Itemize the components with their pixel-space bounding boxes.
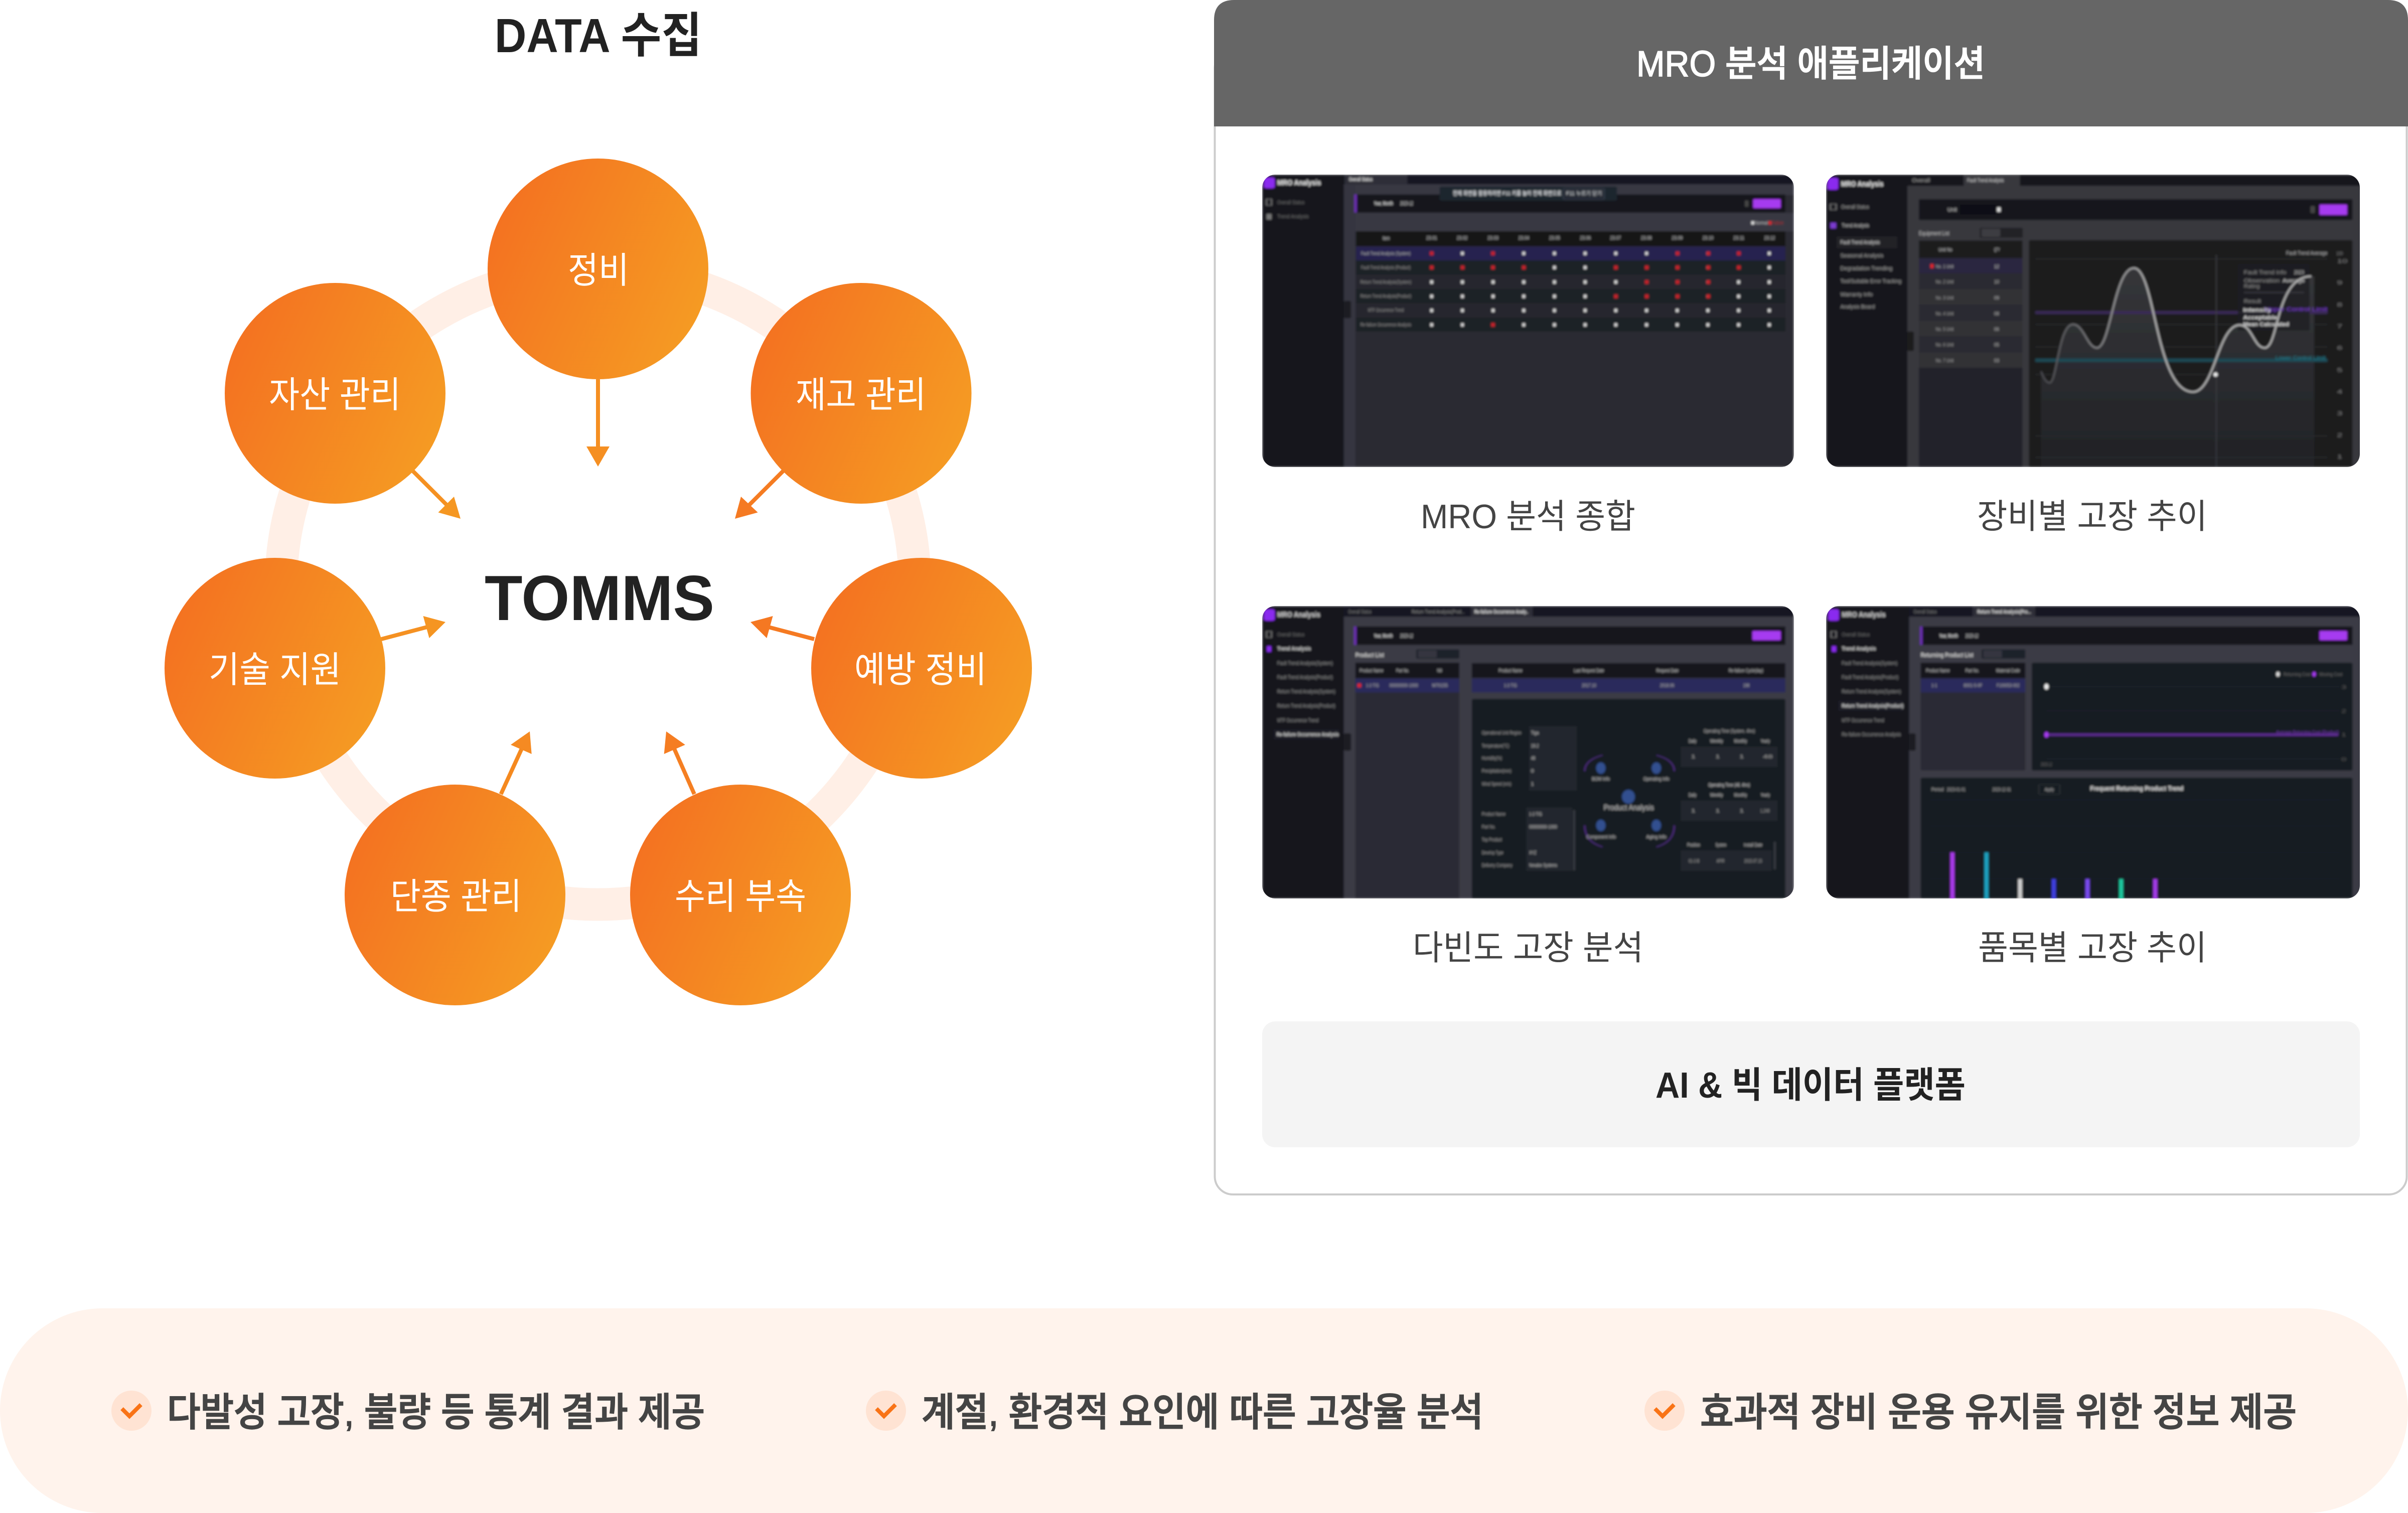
- screenshot: equipment fault trend chart: [1826, 175, 2361, 467]
- screenshot: equipment fault trend chart: Result: [2244, 298, 2262, 305]
- screenshot: equipment fault trend chart: No. 6 Unit: [1936, 342, 1953, 348]
- screenshot: re-failure occurrence analysis: Fault Trend Analysis(Product): [1277, 675, 1333, 680]
- screenshot: re-failure occurrence analysis: 198: [1743, 683, 1749, 688]
- panel header: MRO 분석 애플리케이션: [1636, 44, 1985, 84]
- screenshot: equipment fault trend chart: MRO Analysis: [1841, 180, 1883, 188]
- screenshot: equipment fault trend chart: 10: [1994, 279, 1999, 285]
- screenshot: equipment fault trend chart: 100: [2336, 251, 2343, 256]
- screenshot: equipment fault trend chart: Seasonal Analysis: [1841, 253, 1884, 259]
- screenshot: MRO overall status table: Fault Trend Analysis (Product): [1361, 265, 1411, 270]
- benefit 3: 효과적 장비 운용 유지를 위한 정보 제공: [1700, 1390, 2297, 1434]
- screenshot: MRO overall status table: [1262, 175, 1794, 467]
- node: 자산 관리: 자산 관리: [269, 375, 401, 415]
- node: 수리 부속: 수리 부속: [675, 877, 806, 917]
- screenshot: equipment fault trend chart: 2: [2337, 432, 2342, 438]
- screenshot: equipment fault trend chart: Degradation Trending: [1841, 265, 1892, 271]
- screenshot: equipment fault trend chart: Tool/Suitable Error Tracking: [1841, 278, 1901, 284]
- screenshot: equipment fault trend chart: No. 5 Unit: [1936, 327, 1953, 333]
- screenshot: returning product trend: Returning Cost: [2283, 672, 2311, 677]
- screenshot: equipment fault trend chart: 05: [1994, 342, 1999, 348]
- screenshot: re-failure occurrence analysis: Daily: [1689, 738, 1697, 744]
- screenshot: returning product trend: 2023-12-31: [1992, 787, 2011, 793]
- screenshot: re-failure occurrence analysis: 19.2: [1531, 743, 1539, 749]
- screenshot: re-failure occurrence analysis: 2023-12: [1400, 633, 1413, 639]
- screenshot: equipment fault trend chart: No. 1 Unit: [1936, 264, 1953, 269]
- screenshot: re-failure occurrence analysis: Operating Time (All, 4hrs): [1708, 782, 1750, 788]
- screenshot: equipment fault trend chart: 06: [1994, 327, 1999, 333]
- left section title: DATA 수집: [495, 9, 702, 63]
- screenshot: equipment fault trend chart: 1: [2337, 454, 2342, 460]
- screenshot: returning product trend: 2023-12: [1966, 633, 1979, 639]
- screenshot: re-failure occurrence analysis: Return Trend Analysis(Prod...: [1412, 609, 1465, 615]
- node: 정비: [488, 159, 708, 379]
- screenshot: equipment fault trend chart: 08: [1994, 311, 1999, 317]
- screenshot: equipment fault trend chart: 10: [2337, 258, 2347, 264]
- screenshot: returning product trend: 2023.12: [2041, 762, 2052, 768]
- screenshot: equipment fault trend chart: Rating: [2244, 283, 2260, 289]
- screenshot: equipment fault trend chart: Analysis Board: [1841, 304, 1875, 310]
- screenshot: equipment fault trend chart: No. 3 Unit: [1936, 295, 1953, 301]
- screenshot: MRO overall status table: Return Trend Analysis(System): [1361, 279, 1411, 285]
- node: 단종 관리: 단종 관리: [390, 877, 522, 917]
- screenshot: re-failure occurrence analysis: 1: [1715, 808, 1720, 814]
- screenshot: re-failure occurrence analysis: 1: [1691, 808, 1696, 814]
- screenshot: equipment fault trend chart: 4: [2337, 389, 2342, 395]
- screenshot: returning product trend: Return Trend Analysis(Product): [1842, 703, 1903, 709]
- screenshot: MRO overall status table: Trend Analysis: [1277, 214, 1309, 220]
- screenshot: equipment fault trend chart: Fault Trend Info: [2244, 270, 2286, 276]
- screenshot: equipment fault trend chart: Fault Trend Analysis: [1841, 240, 1880, 246]
- screenshot: MRO overall status table: Re-failure Occurrence Analysis: [1361, 322, 1411, 328]
- screenshot: re-failure occurrence analysis: Install Date: [1744, 842, 1762, 848]
- screenshot: re-failure occurrence analysis: Return Trend Analysis(Product): [1277, 703, 1335, 709]
- screenshot: re-failure occurrence analysis: Humidity(%): [1482, 755, 1502, 761]
- screenshot: re-failure occurrence analysis: 48: [1531, 755, 1535, 761]
- screenshot: equipment fault trend chart: Fault Trend Average: [2286, 250, 2327, 256]
- screenshot: equipment fault trend chart: Fault Trend Analysis: [1967, 178, 2004, 184]
- screenshot: re-failure occurrence analysis: Re-failure Cycle(day): [1729, 668, 1763, 674]
- screenshot: MRO overall status table: Overall Status: [1277, 200, 1305, 206]
- screenshot: re-failure occurrence analysis: Yearly: [1761, 738, 1770, 744]
- arrow: 재고 관리 to TOMMS: [735, 471, 783, 519]
- screenshot: equipment fault trend chart: Mean Calculated: [2243, 321, 2289, 328]
- screenshot: MRO overall status table: 23.10: [1703, 235, 1713, 241]
- screenshot: returning product trend: [1826, 606, 2361, 899]
- node: 정비: 정비: [568, 251, 629, 291]
- screenshot: re-failure occurrence analysis: Re-failure Occurrence Analysis: [1277, 731, 1339, 737]
- screenshot: returning product trend: Part No.: [1966, 668, 1979, 674]
- node: 기술 지원: 기술 지원: [209, 650, 341, 690]
- screenshot: returning product trend: Trend Analysis: [1842, 646, 1876, 652]
- screenshot: returning product trend: Year, Month: [1939, 633, 1958, 639]
- screenshot: MRO overall status table: Overall Status: [1349, 177, 1373, 183]
- screenshot: returning product trend: 1-1: [1931, 683, 1937, 688]
- screenshot: re-failure occurrence analysis: Last Request Date: [1574, 668, 1604, 674]
- screenshot: re-failure occurrence analysis: Monthly: [1734, 738, 1747, 744]
- panel header: [1214, 0, 2408, 126]
- screenshot: returning product trend: Frequent Returning Product Trend: [2090, 785, 2183, 792]
- arrow: 예방 정비 to TOMMS: [750, 616, 814, 639]
- screenshot: re-failure occurrence analysis: Component Info: [1586, 834, 1616, 840]
- strip background: [0, 1308, 2408, 1513]
- screenshot: re-failure occurrence analysis: 1-2-T/G: [1529, 811, 1542, 817]
- screenshot: re-failure occurrence analysis: 00000000-1000: [1529, 824, 1557, 830]
- screenshot: re-failure occurrence analysis: 01-2-B: [1689, 858, 1699, 864]
- screenshot: returning product trend: 8001-5-0F: [1964, 683, 1983, 688]
- screenshot: re-failure occurrence analysis: Re-failure Occurrence Analy..: [1474, 609, 1528, 615]
- screenshot: MRO overall status table: 23.01: [1426, 235, 1437, 241]
- screenshot: equipment fault trend chart: No. 7 Unit: [1936, 358, 1953, 364]
- screenshot: equipment fault trend chart: Overall: [1912, 178, 1930, 184]
- screenshot: equipment fault trend chart: QTY: [1994, 247, 2000, 253]
- screenshot: re-failure occurrence analysis: Part No.: [1396, 668, 1409, 674]
- screenshot: equipment fault trend chart: 03: [1994, 358, 1999, 364]
- screenshot: equipment fault trend chart: Acceptable: [2243, 315, 2277, 321]
- screenshot: returning product trend: 1: [2341, 732, 2346, 738]
- screenshot: equipment fault trend chart: 09: [1994, 295, 1999, 301]
- screenshot: re-failure occurrence analysis: Monthly: [1734, 792, 1747, 798]
- screenshot: equipment fault trend chart: 12: [1994, 264, 1999, 269]
- screenshot: equipment fault trend chart: Warranty Info: [1841, 291, 1873, 297]
- arrow: 정비 to TOMMS: [586, 379, 610, 467]
- screenshot: returning product trend: Re-failure Occurrence Analysis: [1842, 731, 1901, 737]
- screenshot: returning product trend: Period: [1931, 787, 1943, 793]
- screenshot: returning product trend: 0: [2341, 757, 2346, 763]
- screenshot: MRO overall status table: 23.11: [1733, 235, 1744, 241]
- screenshot: re-failure occurrence analysis: Operational Unit Region: [1482, 730, 1521, 736]
- screenshot: MRO overall status table: F11 누르기 닫기: [1566, 191, 1602, 197]
- node: 재고 관리: 재고 관리: [796, 375, 926, 415]
- screenshot: re-failure occurrence analysis: 2017.10: [1582, 683, 1596, 688]
- screenshot: MRO overall status table: Normal: [1755, 220, 1768, 226]
- screenshot: re-failure occurrence analysis: Temperature(°C): [1482, 743, 1509, 749]
- screenshot: re-failure occurrence analysis: Wind Speed (m/s): [1482, 781, 1511, 787]
- screenshot: re-failure occurrence analysis: APIR: [1717, 858, 1724, 864]
- screenshot: re-failure occurrence analysis: 1,248: [1760, 808, 1769, 814]
- screenshot: MRO overall status table: 23.05: [1549, 235, 1560, 241]
- arrow: 수리 부속 to TOMMS: [664, 731, 694, 794]
- screenshot: re-failure occurrence analysis: Daily: [1689, 792, 1697, 798]
- node: 예방 정비: [811, 558, 1032, 779]
- screenshot: returning product trend: Average Returning Cost (Product): [2276, 730, 2339, 735]
- cycle diagram: data sources feeding TOMMS: [165, 159, 1032, 1005]
- screenshot: re-failure occurrence analysis: Product Name: [1360, 668, 1383, 674]
- screenshot: returning product trend: 2023-01-01: [1947, 787, 1966, 793]
- screenshot: equipment fault trend chart: 2023: [2294, 270, 2304, 276]
- screenshot: re-failure occurrence analysis: Aging Info: [1646, 834, 1667, 840]
- screenshot: returning product trend: Moving Cost: [2319, 672, 2342, 677]
- screenshot: re-failure occurrence analysis: Product Analysis: [1604, 803, 1654, 812]
- screenshot: re-failure occurrence analysis: System: [1716, 842, 1726, 848]
- screenshot: re-failure occurrence analysis: Position: [1687, 842, 1700, 848]
- benefit 2: 계절, 환경적 요인에 따른 고장율 분석: [922, 1390, 1483, 1434]
- screenshot: re-failure occurrence analysis: Fault Trend Analysis(System): [1277, 660, 1333, 666]
- screenshot: equipment fault trend chart: No. 2 Unit: [1936, 279, 1953, 285]
- screenshot: returning product trend: Return Trend Analysis(System): [1842, 689, 1901, 695]
- screenshot: re-failure occurrence analysis: 2018.06: [1660, 683, 1674, 688]
- screenshot: re-failure occurrence analysis: 00000000-1000: [1390, 683, 1418, 688]
- screenshot: MRO overall status table: Failure: [1772, 220, 1783, 226]
- screenshot: re-failure occurrence analysis: Top Product: [1482, 837, 1502, 843]
- screenshot: re-failure occurrence analysis: 1: [1691, 754, 1696, 760]
- screenshot: MRO overall status table: Fault Trend Analysis (System): [1361, 251, 1411, 256]
- screenshot: returning product trend: Apply: [2045, 787, 2054, 793]
- screenshot: equipment fault trend chart: Upper Control Limit: [2265, 307, 2328, 313]
- caption: 장비별 고장 추이: 장비별 고장 추이: [1977, 498, 2207, 536]
- ring: [281, 270, 915, 904]
- screenshot: MRO overall status table: Year, Month: [1374, 201, 1393, 207]
- screenshot: MRO overall status table: 23.09: [1672, 235, 1683, 241]
- screenshot: MRO overall status table: MTF Occurrence Trend: [1368, 308, 1404, 313]
- screenshot: re-failure occurrence analysis: 1: [1531, 781, 1534, 787]
- screenshot: re-failure occurrence analysis: 1-2-T/G: [1504, 683, 1517, 688]
- screenshot: MRO overall status table: Item: [1383, 235, 1390, 241]
- screenshot: re-failure occurrence analysis: Overall Status: [1277, 632, 1305, 638]
- screenshot: equipment fault trend chart: 5: [2337, 368, 2342, 374]
- screenshot: equipment fault trend chart: 3: [2337, 410, 2342, 416]
- screenshot: re-failure occurrence analysis: Product List: [1356, 651, 1384, 659]
- screenshot: re-failure occurrence analysis: Develop Type: [1482, 850, 1503, 856]
- screenshot: equipment fault trend chart: Equipment List: [1919, 230, 1949, 237]
- caption: 다빈도 고장 분석: 다빈도 고장 분석: [1413, 929, 1643, 967]
- screenshot: returning product trend: Overall Status: [1842, 632, 1870, 638]
- screenshot: equipment fault trend chart: Intensity: [2243, 307, 2271, 313]
- screenshot: re-failure occurrence analysis: BOM Info: [1592, 777, 1610, 782]
- screenshot: re-failure occurrence analysis: Operating Info: [1643, 777, 1669, 782]
- screenshot: MRO overall status table: 23.03: [1487, 235, 1498, 241]
- screenshot: re-failure occurrence analysis: Precipitation(mm): [1482, 769, 1511, 774]
- arrow: 기술 지원 to TOMMS: [381, 616, 445, 639]
- screenshot: re-failure occurrence analysis: MTF Occurrence Trend: [1277, 717, 1318, 723]
- screenshot: returning product trend: Overall Status: [1913, 609, 1937, 615]
- screenshot: re-failure occurrence analysis: MRO Analysis: [1277, 611, 1320, 619]
- screenshot: equipment fault trend chart: Observation: [2244, 278, 2280, 284]
- benefits strip: [0, 1308, 2408, 1513]
- arrow: 단종 관리 to TOMMS: [501, 731, 532, 794]
- screenshot: returning product trend: 3: [2341, 684, 2346, 690]
- node: 자산 관리: [225, 283, 445, 504]
- node: 기술 지원: [165, 558, 385, 779]
- screenshot: returning product trend: Return Trend Analysis(Pro...: [1977, 609, 2031, 615]
- screenshot: returning product trend: Material Code: [1996, 668, 2020, 674]
- screenshot: equipment fault trend chart: Unit No: [1938, 247, 1952, 253]
- screenshot: re-failure occurrence analysis: NII: [1437, 668, 1442, 674]
- screenshot: re-failure occurrence analysis: Product Name: [1498, 668, 1523, 674]
- screenshot: re-failure occurrence analysis: Return Trend Analysis(System): [1277, 689, 1335, 695]
- screenshot: re-failure occurrence analysis: XYZ: [1529, 850, 1536, 856]
- screenshot: equipment fault trend chart: Overall Status: [1841, 204, 1869, 210]
- panel: MRO application: [1214, 0, 2408, 1194]
- screenshot: re-failure occurrence analysis: [1262, 606, 1794, 898]
- screenshot: re-failure occurrence analysis: Tiga: [1531, 730, 1539, 736]
- caption: MRO 분석 종합: MRO 분석 종합: [1421, 498, 1635, 536]
- screenshot: re-failure occurrence analysis: Weekly: [1710, 738, 1723, 744]
- screenshot: equipment fault trend chart: Trend Analysis: [1842, 223, 1869, 229]
- node: 단종 관리: [345, 785, 565, 1005]
- screenshot: re-failure occurrence analysis: Weekly: [1710, 792, 1723, 798]
- node: 재고 관리: [750, 283, 971, 504]
- screenshot: MRO overall status table: 23.06: [1580, 235, 1591, 241]
- screenshot: MRO overall status table: Return Trend Analysis(Product): [1361, 293, 1411, 299]
- screenshot: returning product trend: Fault Trend Analysis(System): [1842, 660, 1897, 666]
- screenshot: re-failure occurrence analysis: Year, Month: [1374, 633, 1393, 639]
- screenshot: MRO overall status table: 23.12: [1764, 235, 1775, 241]
- screenshot: re-failure occurrence analysis: Trend Analysis: [1277, 646, 1311, 652]
- screenshot: equipment fault trend chart: Average: [2283, 278, 2305, 284]
- screenshot: re-failure occurrence analysis: 1-2-T/G: [1366, 683, 1379, 688]
- screenshot: re-failure occurrence analysis: 0: [1531, 769, 1534, 774]
- screenshot: re-failure occurrence analysis: Delivery Company: [1482, 863, 1513, 868]
- screenshot: equipment fault trend chart: 6: [2337, 345, 2342, 351]
- screenshot: MRO overall status table: 23.04: [1519, 235, 1529, 241]
- screenshot: equipment fault trend chart: 7: [2337, 324, 2342, 330]
- screenshot: re-failure occurrence analysis: Yearly: [1761, 792, 1770, 798]
- screenshot: re-failure occurrence analysis: Nexalon Systems: [1529, 863, 1557, 868]
- arrow: 자산 관리 to TOMMS: [413, 471, 461, 519]
- node: 수리 부속: [630, 785, 851, 1005]
- screenshot: MRO overall status table: 23.07: [1610, 235, 1621, 241]
- screenshot: MRO overall status table: 23.08: [1641, 235, 1652, 241]
- screenshot: returning product trend: Product Name: [1926, 668, 1949, 674]
- screenshot: returning product trend: F100053-002: [1997, 683, 2020, 688]
- screenshot: re-failure occurrence analysis: M70155: [1432, 683, 1448, 688]
- screenshot: MRO overall status table: 23.02: [1457, 235, 1467, 241]
- node: 예방 정비: 예방 정비: [854, 650, 987, 690]
- screenshot: returning product trend: MRO Analysis: [1842, 611, 1886, 619]
- screenshot: equipment fault trend chart: Unit: [1947, 207, 1957, 213]
- platform bar: AI & 빅 데이터 플랫폼: [1656, 1066, 1966, 1106]
- screenshot: re-failure occurrence analysis: 1: [1739, 754, 1744, 760]
- screenshot: MRO overall status table: 2023-12: [1400, 201, 1413, 207]
- screenshot: re-failure occurrence analysis: Product Name: [1482, 811, 1506, 817]
- caption: 품목별 고장 추이: 품목별 고장 추이: [1978, 929, 2207, 967]
- screenshot: re-failure occurrence analysis: 48: [1763, 754, 1773, 760]
- screenshot: re-failure occurrence analysis: Request Date: [1657, 668, 1679, 674]
- platform bar: [1262, 1021, 2360, 1147]
- screenshot: re-failure occurrence analysis: 1: [1715, 754, 1720, 760]
- screenshot: re-failure occurrence analysis: 2015.07.15: [1744, 858, 1762, 864]
- screenshot: re-failure occurrence analysis: Part No.: [1482, 824, 1495, 830]
- screenshot: returning product trend: Returning Product List: [1921, 651, 1974, 659]
- screenshot: re-failure occurrence analysis: Overall Status: [1348, 609, 1372, 615]
- screenshot: equipment fault trend chart: 8: [2337, 302, 2342, 308]
- panel frame: [1215, 50, 2407, 1194]
- benefit 1: 다발성 고장, 불량 등 통계 결과 제공: [167, 1390, 705, 1434]
- screenshot: re-failure occurrence analysis: Operating Time (System, 4hrs): [1704, 728, 1755, 734]
- screenshot: MRO overall status table: MRO Analysis: [1277, 179, 1321, 187]
- screenshot: re-failure occurrence analysis: 1: [1739, 808, 1744, 814]
- screenshot: MRO overall status table: 전체 화면을 활용하려면 F11 키를 눌러 전체 화면으로: [1453, 190, 1561, 197]
- screenshot: returning product trend: Fault Trend Analysis(Product): [1842, 675, 1898, 680]
- screenshot: equipment fault trend chart: Lower Control Limit: [2276, 355, 2326, 361]
- center label: TOMMS: TOMMS: [485, 562, 714, 634]
- screenshot: equipment fault trend chart: 9: [2337, 280, 2342, 286]
- screenshot: equipment fault trend chart: No. 4 Unit: [1936, 311, 1953, 317]
- screenshot: returning product trend: MTF Occurrence Trend: [1842, 717, 1884, 723]
- screenshot: returning product trend: 2: [2341, 709, 2346, 714]
